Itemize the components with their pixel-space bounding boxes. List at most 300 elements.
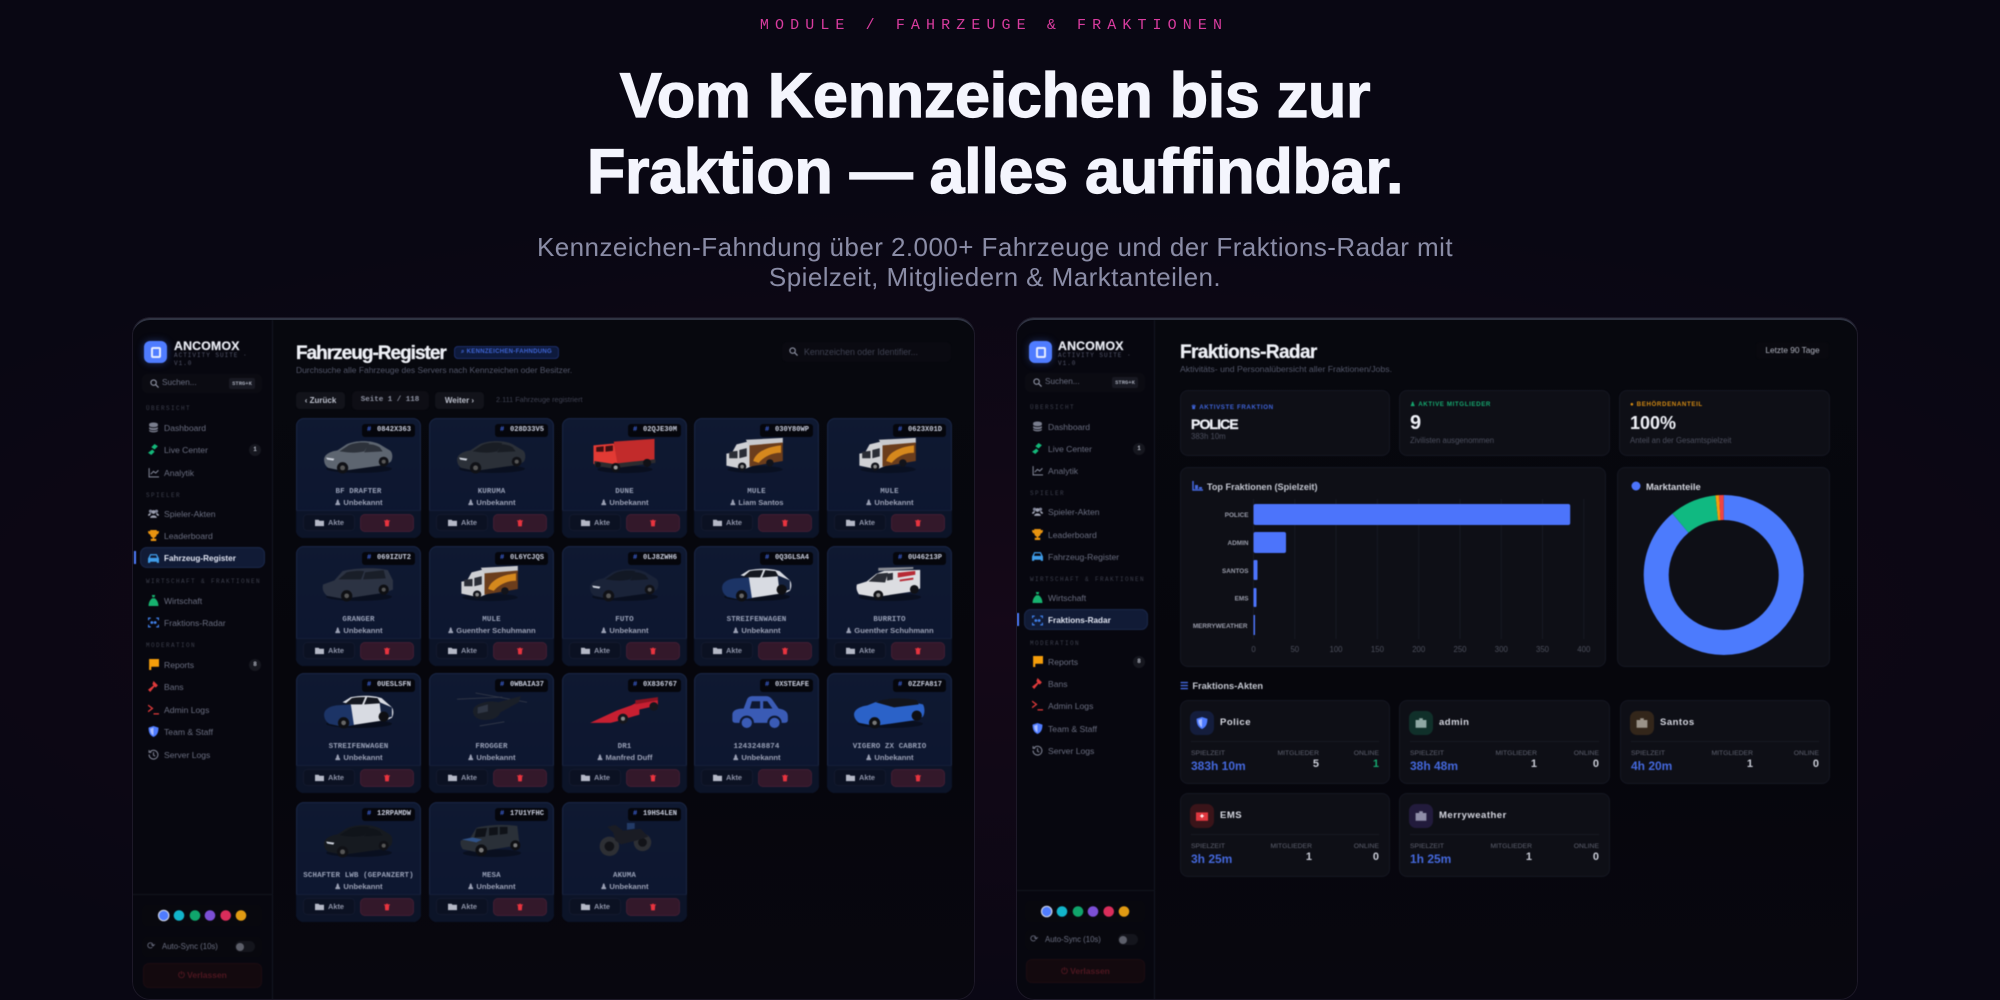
donut title: Marktanteile [1646, 481, 1701, 492]
vehicle card: MESA: # [500, 810, 504, 818]
vehicle card: DUNE: 02QJE30M [643, 426, 677, 434]
vehicle card: FROGGER [429, 673, 554, 793]
vehicle card: FUTO [562, 546, 687, 666]
faction card: Police: ONLINE [1354, 750, 1379, 757]
vehicle card: DR1 [562, 673, 687, 793]
section label: ÜBERSICHT [1030, 404, 1075, 411]
vehicle card: DUNE [562, 418, 687, 538]
stat card: Aktive Mitglieder: 9 [1410, 412, 1421, 434]
axis labels: 100 [1329, 645, 1343, 654]
stat card: Aktivste Fraktion: POLICE [1191, 416, 1238, 432]
axis labels: 250 [1453, 645, 1467, 654]
faction card: Police: MITGLIEDER [1277, 750, 1319, 757]
faction card: Santos: MITGLIEDER [1711, 750, 1753, 757]
faction card: Merryweather: 1h 25m [1410, 852, 1451, 866]
back button [296, 392, 345, 409]
vehicle card: STREIFENWAGEN: Akte [726, 646, 742, 655]
nav item: Analytik [1032, 466, 1078, 476]
stat card: Behördenanteil: ● BEHÖRDENANTEIL [1630, 401, 1703, 408]
vehicle card: MESA: Akte [461, 902, 477, 911]
nav item: Server Logs [148, 749, 210, 760]
theme colour swatches [142, 905, 262, 926]
nav item: Leaderboard [147, 529, 213, 542]
faction card: EMS: SPIELZEIT [1191, 843, 1225, 850]
search field [782, 342, 951, 362]
vehicle card: 1243248874 [694, 673, 819, 793]
vehicle card: GRANGER: Akte [328, 646, 344, 655]
page indicator [352, 391, 428, 410]
stat card: Behördenanteil: Anteil an der Gesamtspielzeit [1630, 436, 1731, 445]
vehicle card: FUTO: Akte [594, 646, 610, 655]
title: Vom Kennzeichen bis zur [620, 61, 1370, 131]
faction card: Santos: SPIELZEIT [1631, 750, 1665, 757]
vehicle card: 1243248874: # [765, 681, 769, 689]
vehicle card: BF DRAFTER: Akte [328, 518, 344, 527]
vehicle card: MULE [694, 418, 819, 538]
section heading: Fraktions-Akten: ☰ Fraktions-Akten [1180, 681, 1263, 691]
nav item: Dashboard [1032, 420, 1090, 432]
vehicle card: SCHAFTER LWB (GEPANZERT) [296, 802, 421, 922]
vehicle card: STREIFENWAGEN: STREIFENWAGEN [329, 743, 388, 751]
vehicle card: KURUMA: # [500, 426, 504, 434]
sidebar footer divider [1016, 890, 1155, 891]
faction card: Santos: Santos [1660, 717, 1695, 728]
vehicle card: MULE: Akte [859, 518, 875, 527]
sidebar: V1.0 [174, 360, 192, 366]
vehicle card: STREIFENWAGEN: 0Q3GLSA4 [775, 554, 809, 562]
nav item: Bans: Bans [164, 682, 184, 692]
faction card: Police: 383h 10m [1191, 759, 1246, 773]
axis labels: 0 [1251, 645, 1256, 654]
nav item: Reports: Reports [1048, 657, 1078, 667]
faction card: admin: 1 [1531, 758, 1537, 770]
nav item: Analytik: Analytik [1048, 466, 1078, 476]
vehicle card: KURUMA: 028D33V5 [510, 426, 544, 434]
vehicle card: BURRITO: BURRITO [873, 616, 906, 624]
vehicle card: MULE: MULE [482, 616, 501, 624]
vehicle card: BURRITO: ♟ Guenther Schuhmann [845, 626, 934, 635]
axis labels: 150 [1371, 645, 1385, 654]
theme colour swatches [1025, 901, 1145, 922]
vehicle card: VIGERO ZX CABRIO [827, 673, 952, 793]
vehicle card: MULE: # [898, 426, 902, 434]
vehicle card: FROGGER: 0WBAIA37 [510, 681, 544, 689]
vehicle card: DR1: Akte [594, 773, 610, 782]
icon: pie [1632, 482, 1640, 490]
vehicle card: FUTO: FUTO [615, 616, 634, 624]
nav item: Bans [1032, 678, 1068, 690]
vehicle card: STREIFENWAGEN: STREIFENWAGEN [727, 616, 786, 624]
vehicle card: 1243248874: 0XSTEAFE [775, 681, 809, 689]
auto-sync toggle row: Auto-Sync (10s) [162, 942, 218, 951]
nav item: Admin Logs: Admin Logs [1048, 701, 1093, 711]
active nav highlight [1024, 609, 1148, 630]
vehicle card: STREIFENWAGEN: Akte [328, 773, 344, 782]
nav item: Team & Staff [1032, 722, 1098, 735]
section label: MODERATION [146, 642, 196, 649]
vehicle card: 1243248874: Akte [726, 773, 742, 782]
chart title: Top Fraktionen (Spielzeit) [1207, 482, 1317, 492]
vehicle card: STREIFENWAGEN: # [367, 681, 371, 689]
sidebar: STRG+K [1115, 379, 1135, 386]
faction card: Police: SPIELZEIT [1191, 750, 1225, 757]
section label: MODERATION [1030, 640, 1080, 647]
faction card: Santos: 4h 20m [1631, 759, 1672, 773]
vehicle card: DR1: # [633, 681, 637, 689]
nav item: Dashboard [148, 422, 206, 433]
page subtitle: Durchsuche alle Fahrzeuge des Servers nach Kennzeichen oder Besitzer. [296, 365, 572, 375]
nav item: Server Logs [1032, 745, 1094, 756]
faction card: Merryweather: 0 [1593, 851, 1599, 863]
vehicle card: AKUMA: # [633, 810, 637, 818]
vehicle card: AKUMA: Akte [594, 902, 610, 911]
leave button: ⏻ Verlassen [178, 970, 227, 980]
vehicle card: MULE: MULE [880, 488, 899, 496]
vehicle card: BURRITO: Akte [859, 646, 875, 655]
sidebar: Suchen... [162, 378, 197, 387]
vehicle card: MULE: ♟ Liam Santos [729, 498, 784, 507]
vehicle card: DUNE: ♟ Unbekannt [600, 498, 649, 507]
nav item: Spieler-Akten: Spieler-Akten [164, 509, 216, 519]
page heading: Fahrzeug-Register [296, 343, 446, 364]
nav item: Live Center: 1 [1137, 445, 1141, 452]
vehicle card: DR1: ♟ Manfred Duff [597, 753, 652, 762]
faction card: admin: MITGLIEDER [1495, 750, 1537, 757]
leave button [143, 963, 262, 988]
sidebar [132, 320, 273, 1000]
sidebar: Suchen... [1045, 377, 1080, 386]
vehicle card: MESA: 17U1YFHC [510, 810, 544, 818]
vehicle card: 1243248874: ♟ Unbekannt [732, 753, 781, 762]
sidebar: ANCOMOX [1058, 339, 1124, 353]
section label: WIRTSCHAFT & FRAKTIONEN [1030, 576, 1145, 583]
leave button [1026, 959, 1145, 983]
stat card: Aktivste Fraktion: 383h 10m [1191, 432, 1226, 441]
vehicle card: MULE [827, 418, 952, 538]
vehicle card: SCHAFTER LWB (GEPANZERT): # [367, 810, 371, 818]
page subtitle: Aktivitäts- und Personalübersicht aller Fraktionen/Jobs. [1180, 364, 1392, 374]
bars [1254, 504, 1570, 635]
subtitle [537, 232, 1453, 292]
vehicle card: FUTO: # [633, 554, 637, 562]
date range selector [1756, 342, 1829, 359]
nav item: Analytik [148, 468, 194, 478]
vehicle card: DR1: DR1 [618, 743, 631, 751]
nav item: Live Center: Live Center [1048, 444, 1092, 454]
vehicle card: MULE: 030Y80WP [775, 426, 809, 434]
nav item: Fahrzeug-Register: Fahrzeug-Register [1048, 552, 1119, 562]
bar labels: MERRYWEATHER [1193, 623, 1248, 630]
faction card: Merryweather: MITGLIEDER [1490, 843, 1532, 850]
nav item: Fraktions-Radar [147, 616, 226, 628]
nav item: Server Logs: Server Logs [164, 750, 210, 760]
donut [1656, 508, 1791, 642]
vehicle card: VIGERO ZX CABRIO: ♟ Unbekannt [865, 753, 914, 762]
vehicle card: FROGGER: # [500, 681, 504, 689]
vehicle card: MULE: 0623X01D [908, 426, 942, 434]
auto-sync toggle row: ⟳ [1030, 934, 1038, 945]
vehicle card: STREIFENWAGEN [296, 673, 421, 793]
title [587, 61, 1403, 207]
vehicle card: MESA: MESA [482, 872, 501, 880]
vehicle card: SCHAFTER LWB (GEPANZERT): SCHAFTER LWB (GEPANZERT) [303, 872, 414, 880]
sidebar [1016, 320, 1155, 1000]
vehicle card: BURRITO: # [898, 554, 902, 562]
stat card: Behördenanteil: 100% [1630, 413, 1676, 433]
axis labels [1251, 645, 1591, 654]
faction card: Santos: 0 [1813, 758, 1819, 770]
nav item: Analytik: Analytik [164, 468, 194, 478]
stat card: Aktive Mitglieder: ♟ AKTIVE MITGLIEDER [1410, 401, 1491, 408]
nav item: Bans: Bans [1048, 679, 1068, 689]
faction card: admin [1399, 700, 1610, 784]
vehicle card: MESA [429, 802, 554, 922]
vehicle card: AKUMA: ♟ Unbekannt [600, 882, 649, 891]
nav item: Live Center: 1 [253, 446, 257, 453]
auto-sync toggle row: ⟳ [147, 941, 155, 952]
vehicle card: MULE: # [500, 554, 504, 562]
nav item: Team & Staff [148, 725, 214, 738]
vehicle card: FROGGER: ♟ Unbekannt [467, 753, 516, 762]
nav item: Team & Staff: Team & Staff [164, 727, 213, 737]
vehicle card: MULE: MULE [747, 488, 766, 496]
vehicle card: MULE: Akte [726, 518, 742, 527]
vehicle card: AKUMA [562, 802, 687, 922]
nav item: Wirtschaft: Wirtschaft [1048, 593, 1086, 603]
nav item: Bans [148, 680, 184, 692]
faction card: Police: Police [1220, 717, 1251, 728]
faction card: admin: SPIELZEIT [1410, 750, 1444, 757]
vehicle card: FROGGER: Akte [461, 773, 477, 782]
badge: ⌕ KENNZEICHEN-FAHNDUNG [461, 349, 552, 355]
auto-sync toggle row [1025, 930, 1145, 950]
vehicle card: BURRITO: 0U46213P [908, 554, 942, 562]
faction card: EMS: 1 [1306, 851, 1312, 863]
vehicle card: MESA: ♟ Unbekannt [467, 882, 516, 891]
badge [454, 346, 559, 359]
faction card: EMS: MITGLIEDER [1270, 843, 1312, 850]
nav item: Dashboard: Dashboard [164, 423, 206, 433]
vehicle card: MULE: Akte [461, 646, 477, 655]
panel: Fraktions-Radar screenshot [1016, 317, 1858, 1000]
auto-sync toggle row: Auto-Sync (10s) [1045, 935, 1101, 944]
nav item: Fahrzeug-Register [147, 553, 236, 564]
vehicle card: MULE [429, 546, 554, 666]
nav item: Live Center [148, 444, 261, 456]
vehicle card: VIGERO ZX CABRIO: VIGERO ZX CABRIO [853, 743, 926, 751]
bar labels [1193, 512, 1249, 630]
sidebar: STRG+K [232, 380, 252, 387]
active indicator [134, 551, 136, 564]
bar labels: ADMIN [1228, 540, 1249, 547]
vehicle card: BF DRAFTER: # [367, 426, 371, 434]
axis labels: 300 [1495, 645, 1508, 654]
vehicle card: MULE: ♟ Unbekannt [865, 498, 914, 507]
stat card: Behördenanteil [1619, 390, 1830, 456]
next button [435, 392, 484, 409]
vehicle card: BURRITO [827, 546, 952, 666]
bar labels: EMS [1235, 596, 1249, 602]
search field: Kennzeichen oder Identifier... [804, 347, 918, 357]
vehicle card: VIGERO ZX CABRIO: # [898, 681, 902, 689]
section label: SPIELER [146, 492, 181, 499]
panel: Fahrzeug-Register screenshot [132, 317, 975, 1000]
faction card: Police: 1 [1373, 758, 1379, 770]
sidebar footer divider [132, 894, 273, 895]
faction card: Merryweather: ONLINE [1574, 843, 1599, 850]
faction card: admin: 38h 48m [1410, 759, 1458, 773]
faction card: EMS: EMS [1220, 810, 1242, 821]
nav item: Admin Logs: Admin Logs [164, 705, 209, 715]
subtitle: Spielzeit, Mitgliedern & Marktanteilen. [769, 262, 1221, 292]
stat card: Aktive Mitglieder [1399, 390, 1610, 456]
sidebar: ACTIVITY SUITE · [174, 352, 248, 359]
nav item: Live Center: Live Center [164, 445, 208, 455]
vehicle card: DUNE: Akte [594, 518, 610, 527]
vehicle card: GRANGER: ♟ Unbekannt [334, 626, 383, 635]
nav item: Leaderboard: Leaderboard [164, 531, 213, 541]
stat card: Aktivste Fraktion [1180, 390, 1390, 456]
eyebrow label: MODULE / FAHRZEUGE & FRAKTIONEN [760, 17, 1228, 34]
faction card: Santos: ONLINE [1794, 750, 1819, 757]
vehicle card: KURUMA: KURUMA [478, 488, 505, 496]
vehicle card: 1243248874: 1243248874 [733, 743, 780, 751]
sidebar: ANCOMOX [174, 339, 240, 353]
panel: bar chart Top Fraktionen [1180, 467, 1606, 667]
faction card: EMS: 0 [1373, 851, 1379, 863]
axis labels: 350 [1536, 645, 1550, 654]
active indicator [1017, 613, 1019, 626]
title: Fraktion — alles auffindbar. [587, 137, 1403, 207]
vehicle card: MULE: 0L6YCJQS [510, 554, 544, 562]
axis labels: 400 [1577, 645, 1591, 654]
faction card: Merryweather: SPIELZEIT [1410, 843, 1444, 850]
vehicle card: KURUMA [429, 418, 554, 538]
faction card: Police: 5 [1313, 758, 1319, 770]
panel: donut chart Marktanteile [1617, 467, 1830, 667]
faction card: admin: ONLINE [1574, 750, 1599, 757]
active nav highlight [140, 547, 265, 568]
axis labels: 200 [1412, 645, 1426, 654]
vehicle card: GRANGER: GRANGER [342, 616, 375, 624]
faction card: Merryweather: 1 [1526, 851, 1532, 863]
vehicle card: BF DRAFTER [296, 418, 421, 538]
vehicle card: AKUMA: AKUMA [613, 872, 636, 880]
nav item: Spieler-Akten: Spieler-Akten [1048, 507, 1100, 517]
nav item: Reports [1032, 655, 1145, 668]
faction card: Merryweather [1399, 793, 1610, 877]
vehicle card: SCHAFTER LWB (GEPANZERT): Akte [328, 902, 344, 911]
stat card: Aktive Mitglieder: Zivilisten ausgenommen [1410, 436, 1494, 445]
nav item: Reports: Reports [164, 660, 194, 670]
faction card: EMS [1180, 793, 1390, 877]
vehicle card: STREIFENWAGEN: 0UESLSFN [377, 681, 411, 689]
vehicle card: FROGGER: FROGGER [475, 743, 508, 751]
nav item: Reports [148, 658, 261, 671]
nav item: Leaderboard [1031, 528, 1097, 541]
date range selector: Letzte 90 Tage [1765, 345, 1820, 355]
vehicle card: DR1: 0X836767 [643, 681, 677, 689]
nav item: Live Center [1032, 442, 1145, 455]
next button: Weiter › [445, 396, 474, 405]
nav item: Leaderboard: Leaderboard [1048, 530, 1097, 540]
faction card: Police [1180, 700, 1390, 784]
vehicle card: STREIFENWAGEN: # [765, 554, 769, 562]
nav item: Admin Logs [147, 704, 210, 716]
vehicle card: GRANGER: # [367, 554, 371, 562]
vehicle card: GRANGER: 069IZUT2 [377, 554, 411, 562]
nav item: Reports: 8 [253, 661, 257, 668]
nav item: Server Logs: Server Logs [1048, 746, 1094, 756]
section label: SPIELER [1030, 490, 1065, 497]
vehicle card: SCHAFTER LWB (GEPANZERT): ♟ Unbekannt [334, 882, 383, 891]
faction card: Merryweather: Merryweather [1439, 810, 1507, 821]
bar labels: SANTOS [1222, 568, 1249, 575]
vehicle card: VIGERO ZX CABRIO: Akte [859, 773, 875, 782]
nav item: Team & Staff: Team & Staff [1048, 724, 1097, 734]
faction card: EMS: ONLINE [1354, 843, 1379, 850]
nav item: Wirtschaft: Wirtschaft [164, 596, 202, 606]
bar labels: POLICE [1225, 512, 1249, 519]
vehicle card: SCHAFTER LWB (GEPANZERT): 12RPAMDW [377, 810, 411, 818]
nav item: Fraktions-Radar: Fraktions-Radar [1048, 616, 1111, 625]
vehicle card: STREIFENWAGEN: ♟ Unbekannt [334, 753, 383, 762]
faction card: EMS: 3h 25m [1191, 852, 1232, 866]
auto-sync toggle row [142, 937, 262, 957]
vehicle card: KURUMA: ♟ Unbekannt [467, 498, 516, 507]
vehicle card: DUNE: DUNE [615, 488, 634, 496]
vehicle card: BF DRAFTER: BF DRAFTER [335, 488, 382, 496]
vehicle card: VIGERO ZX CABRIO: 0ZZFA817 [908, 681, 942, 689]
section label: ÜBERSICHT [146, 405, 191, 412]
vehicle card: FUTO: 0LJ8ZWH6 [643, 554, 677, 562]
vehicle card: AKUMA: 19HS4LEN [643, 810, 677, 818]
vehicle card: DUNE: # [633, 426, 637, 434]
faction card: Santos: 1 [1747, 758, 1753, 770]
page indicator: Seite 1 / 118 [361, 396, 419, 404]
back button: ‹ Zurück [305, 396, 336, 405]
vehicle card: STREIFENWAGEN [694, 546, 819, 666]
nav item: Fahrzeug-Register [1031, 551, 1120, 562]
vehicle card: MULE: ♟ Guenther Schuhmann [447, 626, 536, 635]
nav item: Wirtschaft [1032, 591, 1086, 604]
vehicle card: GRANGER [296, 546, 421, 666]
total count: 2.111 Fahrzeuge registriert [496, 395, 583, 404]
chart icon [1193, 481, 1203, 490]
page heading: Fraktions-Radar [1180, 342, 1317, 363]
subtitle: Kennzeichen-Fahndung über 2.000+ Fahrzeuge und der Fraktions-Radar mit [537, 232, 1453, 262]
vehicle card: FUTO: ♟ Unbekannt [600, 626, 649, 635]
sidebar: ACTIVITY SUITE · [1058, 352, 1132, 359]
vehicle card: BF DRAFTER: 0842X363 [377, 426, 411, 434]
vehicle card: STREIFENWAGEN: ♟ Unbekannt [732, 626, 781, 635]
stat card: Aktivste Fraktion: ♛ AKTIVSTE FRAKTION [1191, 404, 1274, 411]
nav item: Fahrzeug-Register: Fahrzeug-Register [164, 554, 236, 563]
leave button: ⏻ Verlassen [1061, 966, 1110, 976]
axis labels: 50 [1290, 645, 1300, 654]
vehicle card: KURUMA: Akte [461, 518, 477, 527]
nav item: Fraktions-Radar: Fraktions-Radar [164, 618, 226, 628]
faction card: admin: 0 [1593, 758, 1599, 770]
nav item: Dashboard: Dashboard [1048, 422, 1090, 432]
sidebar: V1.0 [1058, 360, 1076, 366]
faction card: Santos [1620, 700, 1830, 784]
nav item: Fraktions-Radar [1031, 614, 1112, 626]
section label: WIRTSCHAFT & FRAKTIONEN [146, 578, 261, 585]
nav item: Wirtschaft [148, 594, 202, 607]
nav item: Reports: 8 [1137, 658, 1141, 665]
nav item: Admin Logs [1031, 700, 1094, 712]
